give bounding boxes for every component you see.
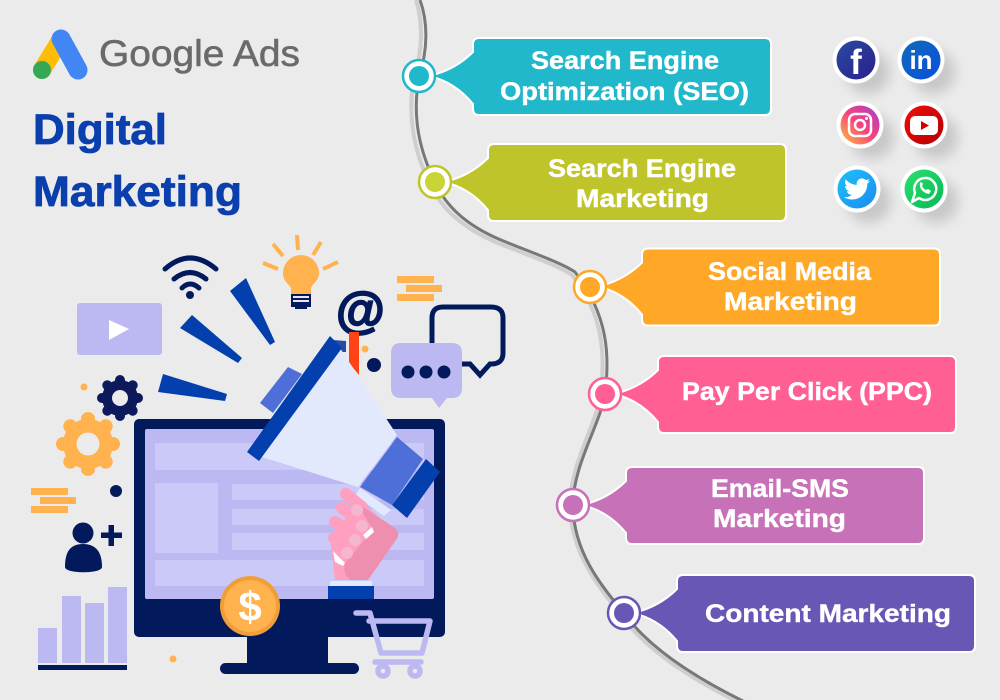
- social media icons: [832, 36, 958, 223]
- icon: YouTube: [900, 102, 958, 159]
- icon: Twitter: [834, 166, 891, 223]
- icon: at sign: @: [336, 282, 385, 338]
- icon: Google Ads mark: [33, 39, 78, 79]
- icon: add user: [65, 522, 122, 572]
- icon: Instagram: [836, 102, 894, 159]
- icon: video player: [77, 303, 162, 355]
- monitor screen: [145, 429, 434, 599]
- callout: Social Media Marketing: [574, 248, 940, 326]
- megaphone sound rays: [158, 278, 275, 401]
- icon: outline chat bubble: [432, 307, 503, 375]
- callout: Email-SMS Marketing: Email-SMS: [711, 475, 849, 503]
- logo wordmark: Google Ads: [99, 33, 300, 74]
- callout: Email-SMS Marketing: Marketing: [713, 505, 846, 533]
- icon: WhatsApp: [900, 166, 958, 223]
- decorative dots: [80, 346, 381, 662]
- icon: dollar coin: [220, 576, 280, 636]
- callout: Search Engine Marketing: [419, 144, 786, 221]
- callout: Pay Per Click: [589, 356, 956, 433]
- callout: Social Media Marketing: Marketing: [724, 288, 857, 316]
- bar chart: [38, 587, 127, 670]
- icon: filled chat bubble: [391, 343, 462, 408]
- title: Marketing: [33, 168, 242, 216]
- callout: Pay Per Click: Pay Per Click (PPC): [682, 378, 932, 406]
- road curve connecting the channels: [411, 0, 745, 700]
- title: [33, 106, 242, 216]
- callout: Search Engine Marketing: Search Engine: [548, 155, 736, 183]
- logo: Google Ads: [33, 33, 300, 79]
- callout: Email-SMS Marketing: [557, 467, 924, 544]
- hand holding megaphone: [328, 488, 398, 599]
- icon: wifi: [165, 258, 216, 299]
- icon: light bulb: [263, 235, 338, 309]
- icon: Facebook: [832, 36, 890, 94]
- icon: shopping cart: [356, 613, 430, 676]
- screen content blocks: [155, 443, 424, 586]
- callout: Search Engine Optimization: Search Engine: [531, 47, 719, 75]
- monitor frame: [134, 419, 445, 637]
- icon: orange gear: [63, 419, 113, 469]
- monitor stand: [220, 630, 359, 674]
- icon: LinkedIn: [898, 36, 955, 94]
- title: Digital: [33, 106, 167, 154]
- icon: Facebook: f: [850, 43, 862, 82]
- icon: dollar coin: $: [238, 583, 262, 630]
- callout: Search Engine Optimization: [403, 38, 771, 115]
- text lines icon: lower left: [31, 488, 76, 513]
- callout: Social Media Marketing: Social Media: [708, 258, 872, 286]
- monitor: [134, 419, 445, 674]
- callout: Content Marketing: Content Marketing: [705, 600, 951, 628]
- icon: LinkedIn: in: [909, 45, 933, 75]
- callout: Search Engine Optimization: Optimization (SEO): [500, 78, 749, 106]
- text lines icon: upper right: [397, 276, 442, 301]
- callout: Search Engine Marketing: Marketing: [576, 185, 709, 213]
- callout: Content Marketing: [608, 575, 975, 652]
- megaphone: [247, 332, 440, 518]
- icon: navy gear: [102, 380, 138, 416]
